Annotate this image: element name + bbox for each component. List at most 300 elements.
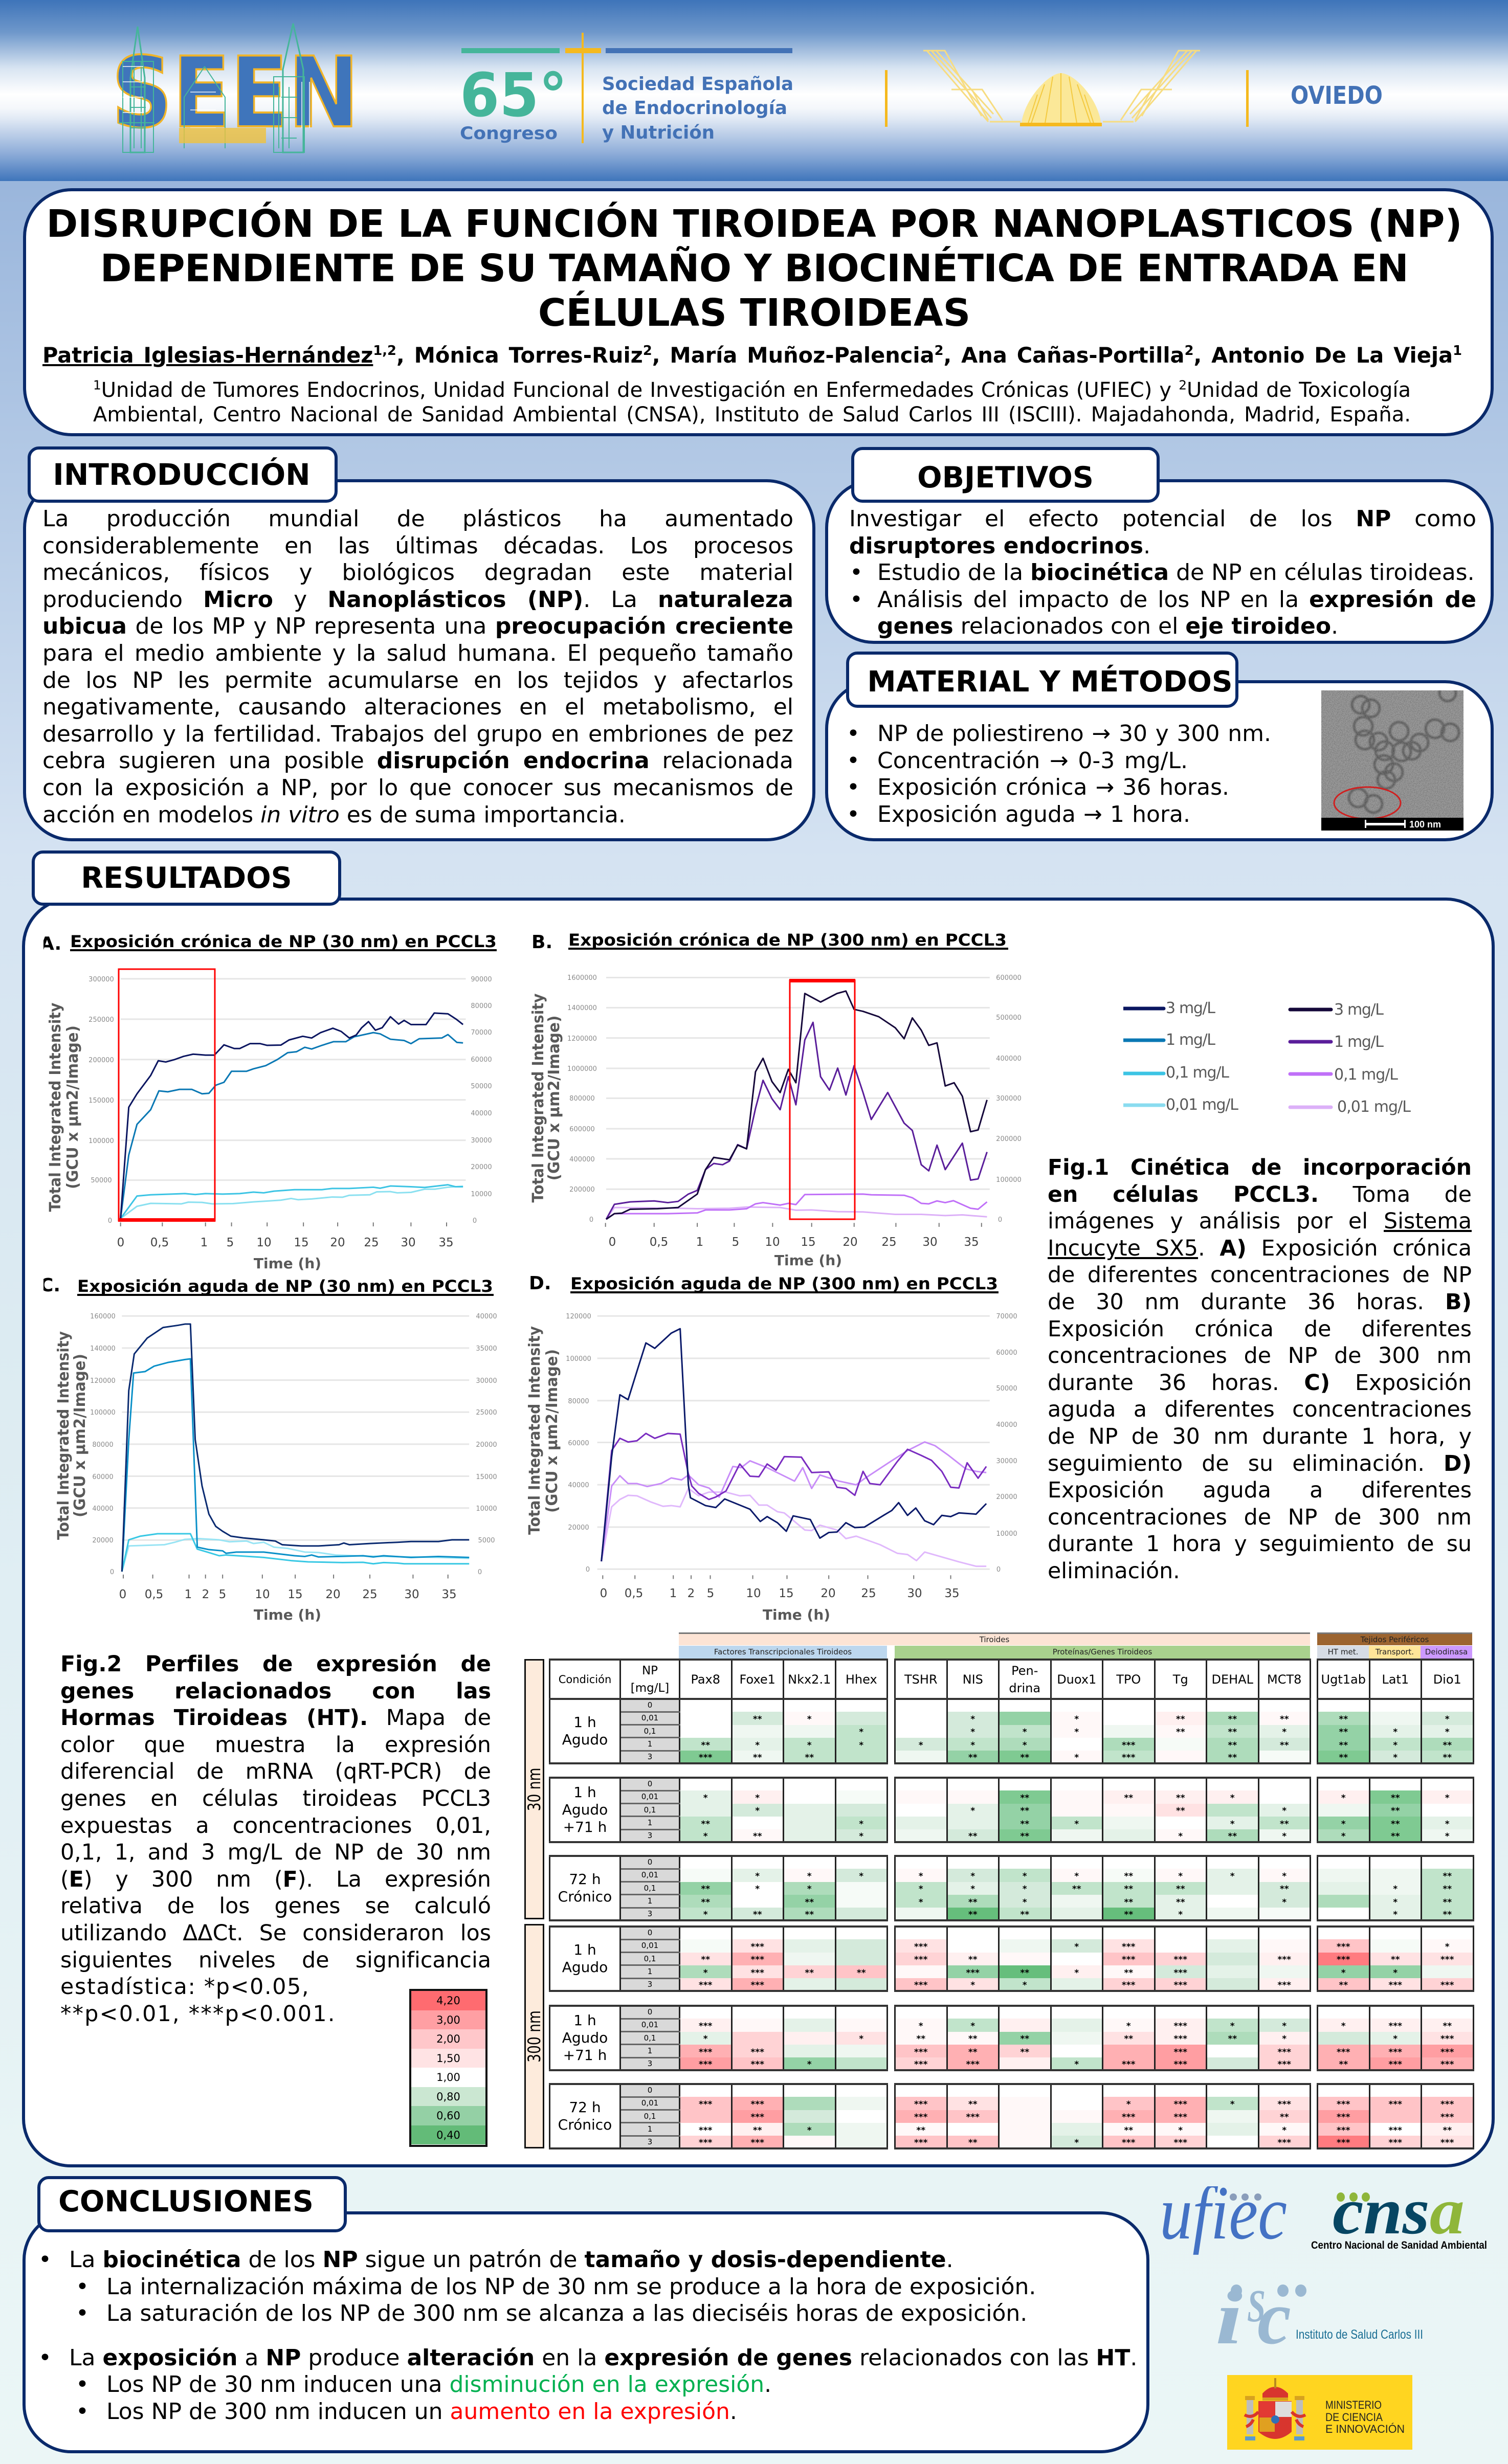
heatmap block: 300 nm, 72 h crónico: 3 bbox=[648, 2137, 652, 2146]
heatmap block: 300 nm, 72 h crónico: *** bbox=[914, 2099, 928, 2110]
panel: material y métodos: • bbox=[847, 801, 860, 827]
chart A axis labels: 80000 bbox=[471, 1002, 492, 1010]
heatmap block: 300 nm, 1 h agudo: ** bbox=[857, 1968, 866, 1978]
logo: Instituto de Salud Carlos III: S bbox=[1247, 2281, 1266, 2332]
heatmap column headers: TPO bbox=[1116, 1672, 1141, 1687]
heading: objetivos: OBJETIVOS bbox=[917, 460, 1094, 494]
logo: Oviedo arch: OVIEDO bbox=[1291, 81, 1383, 110]
heatmap column headers: Dio1 bbox=[1433, 1672, 1461, 1687]
text: introducción bbox=[42, 506, 793, 828]
figure 1 caption: seguimiento de su eliminación. D) bbox=[1048, 1451, 1472, 1476]
text: material list: Exposición crónica → 36 horas. bbox=[877, 774, 1229, 800]
chart D axis labels: 0 bbox=[586, 1566, 590, 1574]
heatmap block: 30 nm, 1 h agudo: ** bbox=[1339, 1740, 1348, 1751]
heatmap block: 30 nm, 1 h agudo: ** bbox=[1228, 1740, 1237, 1751]
figure 2 caption: (E) y 300 nm (F). La expresión bbox=[60, 1867, 491, 1892]
heading: resultados bbox=[32, 850, 341, 906]
heatmap block: 30 nm, 72 h crónico: * bbox=[919, 1897, 923, 1908]
heatmap block: 30 nm, 72 h crónico: * bbox=[703, 1910, 708, 1920]
heatmap block: 300 nm, 72 h crónico: * bbox=[1074, 2138, 1079, 2148]
heatmap block: 30 nm, 1 h agudo: * bbox=[859, 1727, 863, 1737]
heading: introducción bbox=[28, 446, 338, 503]
heatmap block: 300 nm, 1 h agudo: *** bbox=[750, 1968, 764, 1978]
heatmap block: 300 nm, 1 h agudo +71 h: *** bbox=[1277, 2059, 1291, 2070]
chart C axis labels: 15 bbox=[287, 1588, 303, 1601]
chart C axis labels: 5 bbox=[219, 1588, 226, 1601]
heatmap block: 300 nm, 1 h agudo +71 h: *** bbox=[1173, 2034, 1187, 2044]
heatmap block: 300 nm, 72 h crónico: *** bbox=[1440, 2099, 1454, 2110]
heatmap block: 30 nm, 1 h agudo: ** bbox=[1020, 1753, 1029, 1763]
chart A axis labels: 0 bbox=[117, 1236, 124, 1249]
heatmap block: 300 nm, 1 h agudo +71 h: *** bbox=[914, 2059, 928, 2070]
heatmap block: 300 nm, 1 h agudo: 0,01 bbox=[641, 1941, 658, 1950]
heatmap block: 30 nm, 72 h crónico bbox=[549, 1855, 1474, 1921]
chart D heading: D. bbox=[529, 1273, 551, 1294]
figure 1 caption: en células PCCL3. Toma de bbox=[1048, 1182, 1472, 1207]
heatmap block: 300 nm, 72 h crónico: *** bbox=[914, 2112, 928, 2122]
chart A axis labels: 30 bbox=[401, 1236, 416, 1249]
chart A axis labels: 20000 bbox=[471, 1163, 492, 1171]
chart B axis labels: 1000000 bbox=[567, 1065, 597, 1073]
heatmap block: 300 nm, 1 h agudo +71 h: 0,1 bbox=[644, 2033, 656, 2043]
chart A axis labels: 20 bbox=[330, 1236, 345, 1249]
text: objetivos: Estudio de la biocinética de NP en células tiroideas. bbox=[877, 559, 1475, 586]
heading: objetivos bbox=[851, 447, 1160, 503]
heatmap block: 30 nm, 1 h agudo: 0,1 bbox=[644, 1727, 656, 1736]
heatmap block: 30 nm, 1 h agudo +71 h: 0 bbox=[648, 1779, 652, 1788]
chart A axis labels: 150000 bbox=[88, 1097, 114, 1105]
text: conclusiones: • bbox=[76, 2300, 89, 2326]
heatmap block: 30 nm, 72 h crónico: * bbox=[859, 1871, 863, 1881]
heatmap column headers: NIS bbox=[963, 1672, 983, 1687]
chart A axis labels: 10 bbox=[256, 1236, 272, 1249]
heatmap block: 300 nm, 1 h agudo +71 h: *** bbox=[1440, 2059, 1454, 2070]
logo: 65 congreso bbox=[460, 33, 793, 144]
heatmap block: 300 nm, 1 h agudo: * bbox=[1341, 1968, 1346, 1978]
chart C axis labels: 10 bbox=[255, 1588, 270, 1601]
text: conclusiones: • bbox=[76, 2399, 89, 2425]
heatmap block: 30 nm, 1 h agudo +71 h: ** bbox=[1020, 1819, 1029, 1829]
heatmap block: 30 nm, 1 h agudo: ** bbox=[753, 1714, 762, 1724]
chart C axis labels: 40000 bbox=[476, 1313, 497, 1320]
chart B axis labels: 400000 bbox=[569, 1156, 595, 1163]
heatmap block: 300 nm, 1 h agudo: * bbox=[1074, 1942, 1079, 1952]
heatmap block: 30 nm, 1 h agudo: * bbox=[1074, 1714, 1079, 1724]
figure 1 caption: imágenes y análisis por el Sistema bbox=[1048, 1208, 1472, 1234]
heatmap block: 300 nm, 1 h agudo +71 h: * bbox=[859, 2034, 863, 2044]
heatmap block: 30 nm, 1 h agudo +71 h: * bbox=[1341, 1831, 1346, 1842]
panel: conclusiones bbox=[23, 2176, 1149, 2453]
heatmap block: 30 nm, 72 h crónico: ** bbox=[805, 1910, 814, 1920]
text: introducción: La producción mundial de plásticos ha aumentado bbox=[42, 506, 793, 532]
heatmap block: 30 nm, 1 h agudo: * bbox=[970, 1727, 975, 1737]
chart B plot and data lines bbox=[606, 978, 990, 1227]
chart A axis labels: Time (h) bbox=[254, 1255, 321, 1272]
heatmap block: 30 nm, 72 h crónico: * bbox=[1023, 1871, 1027, 1881]
chart B heading: Exposición crónica de NP (300 nm) en PCCL3 bbox=[568, 931, 1007, 950]
heatmap block: 30 nm, 1 h agudo +71 h: * bbox=[703, 1793, 708, 1803]
heatmap block: 300 nm, 1 h agudo: ** bbox=[1124, 1968, 1133, 1978]
heatmap block: 300 nm, 1 h agudo: ** bbox=[805, 1968, 814, 1978]
chart legend: concentrations: 0,01 mg/L bbox=[1166, 1096, 1238, 1114]
heatmap block: 300 nm, 1 h agudo: ** bbox=[1391, 1955, 1400, 1965]
chart A plot and data lines bbox=[121, 979, 466, 1226]
logo: Oviedo arch bbox=[885, 51, 1383, 127]
heatmap block: 30 nm, 72 h crónico: * bbox=[755, 1871, 760, 1881]
heatmap: gene expression bbox=[522, 1629, 1476, 2151]
chart C axis labels: 20 bbox=[325, 1588, 341, 1601]
heatmap block: 300 nm, 72 h crónico: *** bbox=[1440, 2112, 1454, 2122]
heatmap block: 300 nm, 1 h agudo: 0,1 bbox=[644, 1954, 656, 1963]
heatmap block: 30 nm, 1 h agudo: *** bbox=[1122, 1753, 1136, 1763]
logo: 65 congreso: 65° bbox=[460, 60, 567, 130]
chart D axis labels: 120000 bbox=[566, 1313, 591, 1320]
heatmap column headers: Tg bbox=[1173, 1672, 1188, 1687]
heatmap block: 30 nm, 1 h agudo +71 h: * bbox=[1282, 1831, 1287, 1842]
chart A axis labels: 60000 bbox=[471, 1056, 492, 1064]
heatmap block: 300 nm, 72 h crónico: 0,01 bbox=[641, 2098, 658, 2108]
chart A axis labels: 0 bbox=[108, 1217, 112, 1225]
heatmap block: 300 nm, 1 h agudo +71 h: *** bbox=[699, 2021, 713, 2031]
image: TEM micrograph of nanoplastics bbox=[1321, 690, 1463, 831]
figure 2 caption: genes en células tiroideas PCCL3 bbox=[60, 1786, 491, 1811]
heatmap block: 300 nm, 1 h agudo: *** bbox=[1173, 1968, 1187, 1978]
figure 1 caption: durante 1 hora y seguimiento de su bbox=[1048, 1531, 1472, 1557]
chart B axis labels: 35 bbox=[964, 1236, 979, 1249]
heatmap block: 300 nm, 72 h crónico: *** bbox=[1122, 2138, 1136, 2148]
heatmap block: 30 nm, 1 h agudo: * bbox=[1074, 1727, 1079, 1737]
heatmap block: 300 nm, 72 h crónico: * bbox=[807, 2125, 812, 2136]
heatmap block: 30 nm, 1 h agudo: 0 bbox=[648, 1700, 652, 1710]
heatmap column headers bbox=[549, 1659, 1474, 1700]
heatmap block: 300 nm, 72 h crónico: ** bbox=[1280, 2112, 1289, 2122]
heatmap block: 30 nm, 1 h agudo +71 h: * bbox=[1230, 1819, 1235, 1829]
heatmap block: 300 nm, 1 h agudo +71 h: ** bbox=[1020, 2047, 1029, 2057]
heatmap block: 30 nm, 72 h crónico: * bbox=[807, 1871, 812, 1881]
heatmap block: 300 nm, 1 h agudo +71 h: ** bbox=[1228, 2034, 1237, 2044]
text: objetivos: • bbox=[850, 559, 863, 586]
chart A axis labels: 25 bbox=[364, 1236, 379, 1249]
chart C axis labels: 0,5 bbox=[145, 1588, 163, 1601]
heatmap block: 300 nm, 1 h agudo: 1 bbox=[648, 1967, 652, 1976]
chart B axis labels: 200000 bbox=[569, 1186, 595, 1194]
heatmap block: 300 nm, 72 h crónico: *** bbox=[1277, 2138, 1291, 2148]
chart D axis labels: 60000 bbox=[996, 1349, 1017, 1357]
chart B axis labels: 1 bbox=[696, 1236, 703, 1249]
heatmap block: 300 nm, 1 h agudo: *** bbox=[1337, 1955, 1350, 1965]
chart C heading: Exposición aguda de NP (30 nm) en PCCL3 bbox=[77, 1276, 493, 1296]
chart B axis labels: 15 bbox=[801, 1236, 816, 1249]
chart D axis labels: 10000 bbox=[996, 1530, 1017, 1538]
heatmap block: 300 nm, 1 h agudo: *** bbox=[966, 1968, 980, 1978]
figure 1 caption: concentraciones de NP de 300 nm bbox=[1048, 1343, 1472, 1369]
heatmap block: 300 nm, 72 h crónico: *** bbox=[699, 2099, 713, 2110]
chart C axis labels bbox=[90, 1313, 497, 1623]
heatmap block: 30 nm, 1 h agudo +71 h: ** bbox=[701, 1819, 710, 1829]
heatmap block: 300 nm, 72 h crónico bbox=[549, 2083, 1474, 2149]
heatmap block: 300 nm, 1 h agudo: *** bbox=[1122, 1955, 1136, 1965]
panel: material y métodos: • bbox=[847, 774, 860, 800]
color scale legend: 0,80 bbox=[436, 2091, 460, 2103]
heatmap block: 300 nm, 72 h crónico: ** bbox=[968, 2099, 978, 2110]
heatmap block: 30 nm, 1 h agudo: * bbox=[970, 1714, 975, 1724]
heatmap block: 30 nm, 1 h agudo: ** bbox=[1280, 1714, 1289, 1724]
chart D axis labels: 40000 bbox=[568, 1482, 589, 1489]
heatmap block: 30 nm, 72 h crónico: * bbox=[1282, 1871, 1287, 1881]
chart C y axis title bbox=[55, 1331, 89, 1540]
heatmap block: 300 nm, 1 h agudo: *** bbox=[1277, 1980, 1291, 1990]
chart B axis labels: 30 bbox=[922, 1236, 938, 1249]
chart D axis labels: 30 bbox=[907, 1587, 922, 1600]
heatmap block: 300 nm, 1 h agudo: *** bbox=[1122, 1942, 1136, 1952]
heatmap block: 30 nm, 1 h agudo +71 h: 3 bbox=[648, 1831, 652, 1840]
heatmap block: 300 nm, 72 h crónico: *** bbox=[1388, 2125, 1402, 2136]
heatmap block: 30 nm, 1 h agudo +71 h bbox=[549, 1777, 1474, 1843]
chart A axis labels: 10000 bbox=[471, 1191, 492, 1198]
logo: Ministerio de Ciencia e Innovación: MINISTERIO bbox=[1325, 2399, 1382, 2411]
heatmap column headers: Pen- bbox=[1011, 1663, 1038, 1677]
heatmap column headers: Lat1 bbox=[1382, 1672, 1409, 1687]
heatmap block: 300 nm, 1 h agudo +71 h: *** bbox=[750, 2047, 764, 2057]
chart A heading: Exposición crónica de NP (30 nm) en PCCL3 bbox=[70, 932, 497, 951]
heatmap block: 30 nm, 1 h agudo +71 h: ** bbox=[1176, 1806, 1185, 1816]
chart A axis labels: 0 bbox=[473, 1217, 477, 1225]
figure 2 caption bbox=[60, 1651, 491, 2027]
figure 2 caption: siguientes niveles de significancia bbox=[60, 1947, 491, 1973]
heatmap block: 300 nm, 1 h agudo +71 h: 0,01 bbox=[641, 2020, 658, 2029]
heatmap column headers: Foxe1 bbox=[740, 1672, 775, 1687]
figure 2 caption: Fig.2 Perfiles de expresión de bbox=[60, 1651, 491, 1677]
heatmap block: 30 nm, 1 h agudo: * bbox=[807, 1714, 812, 1724]
logo: 65 congreso: de Endocrinología bbox=[602, 98, 787, 119]
chart B axis labels: 20 bbox=[842, 1236, 858, 1249]
panel: objetivos bbox=[825, 447, 1494, 644]
chart D: acute exposure 300 nm bbox=[527, 1268, 1038, 1626]
heatmap block: 30 nm, 72 h crónico: ** bbox=[701, 1897, 710, 1908]
chart C: acute exposure 30 nm bbox=[43, 1268, 509, 1626]
chart D axis labels bbox=[566, 1313, 1017, 1623]
text: introducción: ubicua de los MP y NP representa una preocupación creciente bbox=[42, 613, 793, 639]
chart A axis labels: 200000 bbox=[88, 1057, 114, 1064]
heatmap block: 30 nm, 1 h agudo +71 h: Agudo bbox=[562, 1801, 608, 1818]
heatmap block: 30 nm, 72 h crónico: 0,1 bbox=[644, 1884, 656, 1893]
affiliations bbox=[93, 378, 1411, 427]
chart D plot and data lines bbox=[597, 1316, 990, 1579]
text: introducción: para el medio ambiente y la salud humana. El pequeño tamaño bbox=[42, 640, 793, 666]
chart A axis labels: 30000 bbox=[471, 1137, 492, 1145]
chart A y axis title bbox=[47, 1002, 82, 1212]
heatmap block: 30 nm, 1 h agudo +71 h: * bbox=[755, 1806, 760, 1816]
heatmap block: 30 nm, 72 h crónico: ** bbox=[701, 1884, 710, 1894]
figure 1 caption: Exposición aguda a diferentes bbox=[1048, 1477, 1472, 1503]
heatmap column headers: TSHR bbox=[904, 1672, 938, 1687]
figure 2 caption: **p<0.01, ***p<0.001. bbox=[60, 2001, 336, 2027]
heatmap block: 300 nm, 72 h crónico: *** bbox=[1440, 2138, 1454, 2148]
figure 2 caption: utilizando ΔΔCt. Se consideraron los bbox=[60, 1920, 491, 1946]
heatmap block: 30 nm, 1 h agudo +71 h: * bbox=[1341, 1819, 1346, 1829]
heatmap block: 300 nm, 72 h crónico: *** bbox=[750, 2099, 764, 2110]
heatmap block: 30 nm, 1 h agudo +71 h: 0,1 bbox=[644, 1805, 656, 1815]
heatmap block: 300 nm, 1 h agudo +71 h: *** bbox=[1440, 2047, 1454, 2057]
size label: 30 nm bbox=[524, 1659, 544, 1919]
heatmap block: 300 nm, 72 h crónico: *** bbox=[914, 2138, 928, 2148]
chart B axis labels: 400000 bbox=[996, 1055, 1022, 1063]
heatmap group headers: HT met. bbox=[1328, 1647, 1358, 1656]
color scale legend: 0,40 bbox=[436, 2129, 460, 2141]
heatmap block: 300 nm, 1 h agudo: ** bbox=[1020, 1968, 1029, 1978]
heatmap block: 30 nm, 72 h crónico: * bbox=[1230, 1871, 1235, 1881]
heatmap block: 30 nm, 1 h agudo: ** bbox=[805, 1753, 814, 1763]
chart B axis labels: 200000 bbox=[996, 1135, 1022, 1143]
heatmap block: 30 nm, 72 h crónico: ** bbox=[1176, 1897, 1185, 1908]
heatmap block: 300 nm, 1 h agudo: * bbox=[970, 1980, 975, 1990]
heatmap block: 30 nm, 1 h agudo: * bbox=[919, 1740, 923, 1751]
chart D axis labels: 60000 bbox=[568, 1440, 589, 1447]
heatmap block: 30 nm, 1 h agudo +71 h: ** bbox=[1391, 1806, 1400, 1816]
heatmap block: 30 nm, 1 h agudo: * bbox=[807, 1740, 812, 1751]
heatmap block: 300 nm, 72 h crónico: ** bbox=[1124, 2125, 1133, 2136]
heatmap column headers: Hhex bbox=[846, 1672, 877, 1687]
heatmap block: 30 nm, 72 h crónico: * bbox=[919, 1871, 923, 1881]
chart legend: concentrations: 1 mg/L bbox=[1334, 1033, 1384, 1051]
heatmap block: 300 nm, 1 h agudo +71 h: ** bbox=[1443, 2021, 1452, 2031]
heatmap block: 30 nm, 72 h crónico: ** bbox=[1124, 1910, 1133, 1920]
panel: material y métodos: • bbox=[847, 748, 860, 774]
heatmap block: 30 nm, 1 h agudo +71 h: ** bbox=[1228, 1831, 1237, 1842]
color scale legend: 3,00 bbox=[436, 2014, 460, 2026]
chart B axis labels: 800000 bbox=[569, 1095, 595, 1103]
heatmap block: 30 nm, 72 h crónico: Crónico bbox=[558, 1888, 612, 1905]
title bbox=[47, 201, 1462, 335]
heatmap block: 30 nm, 72 h crónico: ** bbox=[753, 1910, 762, 1920]
heatmap block: 300 nm, 1 h agudo +71 h: *** bbox=[699, 2047, 713, 2057]
chart C axis labels: 10000 bbox=[476, 1505, 497, 1513]
figure 1 caption: durante 36 horas. C) Exposición bbox=[1048, 1370, 1472, 1396]
logo: cnsa bbox=[1311, 2175, 1487, 2251]
heading: material y métodos: MATERIAL Y MÉTODOS bbox=[867, 665, 1233, 699]
chart D axis labels: 15 bbox=[779, 1587, 794, 1600]
heatmap block: 300 nm, 1 h agudo: *** bbox=[914, 1955, 928, 1965]
chart B axis labels: 600000 bbox=[569, 1126, 595, 1133]
chart D axis labels: 1 bbox=[670, 1587, 677, 1600]
chart A axis labels bbox=[88, 976, 492, 1272]
text: introducción: considerablemente en las últimas décadas. Los procesos bbox=[42, 533, 793, 559]
color scale legend: 4,20 bbox=[436, 1995, 460, 2007]
heatmap block: 30 nm, 72 h crónico: * bbox=[1178, 1871, 1183, 1881]
heatmap block: 30 nm, 72 h crónico: * bbox=[1074, 1871, 1079, 1881]
heatmap block: 30 nm, 72 h crónico: ** bbox=[1124, 1871, 1133, 1881]
text: material list: Concentración → 0-3 mg/L. bbox=[877, 748, 1188, 774]
text: conclusiones: La saturación de los NP de 300 nm se alcanza a las dieciséis horas de exposición. bbox=[106, 2300, 1027, 2326]
chart D axis labels: 5 bbox=[707, 1587, 714, 1600]
heatmap block: 30 nm, 1 h agudo: ** bbox=[1280, 1740, 1289, 1751]
heatmap block: 300 nm, 1 h agudo +71 h bbox=[549, 2005, 1474, 2071]
text: conclusiones: • bbox=[76, 2371, 89, 2398]
heatmap block: 300 nm, 72 h crónico: *** bbox=[1337, 2125, 1350, 2136]
text: objetivos: disruptores endocrinos. bbox=[849, 533, 1150, 559]
chart B axis labels: 0 bbox=[998, 1216, 1002, 1224]
heatmap block: 30 nm, 1 h agudo: ** bbox=[1443, 1753, 1452, 1763]
heatmap block: 300 nm, 1 h agudo +71 h: *** bbox=[1173, 2021, 1187, 2031]
heatmap block: 300 nm, 1 h agudo: *** bbox=[750, 1955, 764, 1965]
chart A: chronic exposure 30 nm bbox=[43, 931, 509, 1279]
figure 1 caption: de diferentes concentraciones de NP bbox=[1048, 1262, 1472, 1288]
text: material list: NP de poliestireno → 30 y 300 nm. bbox=[877, 721, 1271, 747]
heatmap block: 300 nm, 1 h agudo +71 h: * bbox=[1341, 2021, 1346, 2031]
chart D y axis title bbox=[526, 1326, 561, 1535]
chart D axis labels: Time (h) bbox=[763, 1606, 830, 1623]
chart A axis labels: 90000 bbox=[471, 976, 492, 983]
heatmap block: 30 nm, 1 h agudo +71 h: ** bbox=[1280, 1819, 1289, 1829]
heatmap column headers: Condición bbox=[559, 1673, 611, 1686]
heatmap block: 30 nm, 1 h agudo: ** bbox=[1228, 1727, 1237, 1737]
chart B axis labels: 1600000 bbox=[567, 974, 597, 982]
heatmap block: 30 nm, 72 h crónico: ** bbox=[1176, 1884, 1185, 1894]
heatmap column headers: drina bbox=[1009, 1681, 1040, 1695]
heatmap block: 300 nm, 1 h agudo +71 h: ** bbox=[1124, 2034, 1133, 2044]
text: objetivos: Investigar el efecto potencial de los NP como bbox=[849, 506, 1476, 532]
chart B y axis title bbox=[529, 993, 563, 1203]
chart A axis labels: 100000 bbox=[88, 1137, 114, 1145]
heatmap block: 30 nm, 72 h crónico: ** bbox=[1280, 1884, 1289, 1894]
chart D axis labels: 25 bbox=[861, 1587, 876, 1600]
chart legend: concentrations: 1 mg/L bbox=[1166, 1031, 1215, 1049]
heatmap block: 30 nm, 72 h crónico: 1 bbox=[648, 1896, 652, 1906]
chart C axis labels: 140000 bbox=[90, 1345, 116, 1353]
heatmap block: 30 nm, 72 h crónico: ** bbox=[1072, 1884, 1081, 1894]
heatmap block: 30 nm, 72 h crónico: * bbox=[1393, 1897, 1398, 1908]
chart B axis labels: 25 bbox=[881, 1236, 897, 1249]
heatmap block: 300 nm, 72 h crónico: *** bbox=[1173, 2112, 1187, 2122]
size label: 300 nm: 300 nm bbox=[524, 2010, 544, 2062]
heatmap block: 300 nm, 1 h agudo +71 h: *** bbox=[1388, 2047, 1402, 2057]
chart C axis labels: 120000 bbox=[90, 1377, 116, 1385]
heatmap block: 30 nm, 1 h agudo +71 h: * bbox=[1445, 1793, 1450, 1803]
heatmap block: 300 nm, 1 h agudo +71 h: *** bbox=[1388, 2059, 1402, 2070]
heatmap block: 30 nm, 1 h agudo: * bbox=[755, 1740, 760, 1751]
chart B axis labels: Time (h) bbox=[774, 1252, 842, 1269]
heatmap block: 300 nm, 72 h crónico: 1 bbox=[648, 2124, 652, 2134]
heatmap block: 300 nm, 72 h crónico: *** bbox=[750, 2138, 764, 2148]
heatmap block: 300 nm, 1 h agudo +71 h: *** bbox=[914, 2047, 928, 2057]
heatmap block: 30 nm, 72 h crónico: ** bbox=[1443, 1910, 1452, 1920]
chart B axis labels: 500000 bbox=[996, 1014, 1022, 1022]
figure 2 caption: diferencial de mRNA (qRT-PCR) de bbox=[60, 1759, 491, 1784]
heatmap block: 300 nm, 72 h crónico: * bbox=[1126, 2099, 1131, 2110]
chart B axis labels: 300000 bbox=[996, 1095, 1022, 1103]
heatmap block: 30 nm, 1 h agudo: * bbox=[1445, 1714, 1450, 1724]
chart B axis labels: 10 bbox=[765, 1236, 780, 1249]
heatmap column headers: DEHAL bbox=[1211, 1672, 1253, 1687]
chart legend: concentrations: 3 mg/L bbox=[1334, 1001, 1384, 1019]
text: objetivos: Análisis del impacto de los NP en la expresión de bbox=[877, 587, 1476, 613]
chart A axis labels: 35 bbox=[438, 1236, 454, 1249]
heatmap block: 300 nm, 72 h crónico: ** bbox=[753, 2125, 762, 2136]
heatmap block: 300 nm, 1 h agudo: * bbox=[1074, 1968, 1079, 1978]
size label: 300 nm bbox=[524, 1924, 544, 2148]
heatmap block: 300 nm, 1 h agudo +71 h: * bbox=[1126, 2021, 1131, 2031]
text: introducción: de los NP les permite acumularse en los tejidos y afectarlos bbox=[42, 667, 793, 693]
chart D axis labels: 35 bbox=[944, 1587, 960, 1600]
heatmap block: 300 nm, 1 h agudo +71 h: ** bbox=[1020, 2034, 1029, 2044]
chart C axis labels: 20000 bbox=[476, 1441, 497, 1449]
figure 2 caption: genes relacionados con las bbox=[60, 1678, 491, 1704]
text: material list bbox=[853, 721, 1314, 828]
heatmap block: 30 nm, 1 h agudo +71 h: * bbox=[1445, 1819, 1450, 1829]
heatmap block: 300 nm, 1 h agudo +71 h: * bbox=[1074, 2059, 1079, 2070]
heatmap block: 30 nm, 1 h agudo: Agudo bbox=[562, 1731, 608, 1748]
chart C axis labels: 0 bbox=[110, 1569, 114, 1576]
